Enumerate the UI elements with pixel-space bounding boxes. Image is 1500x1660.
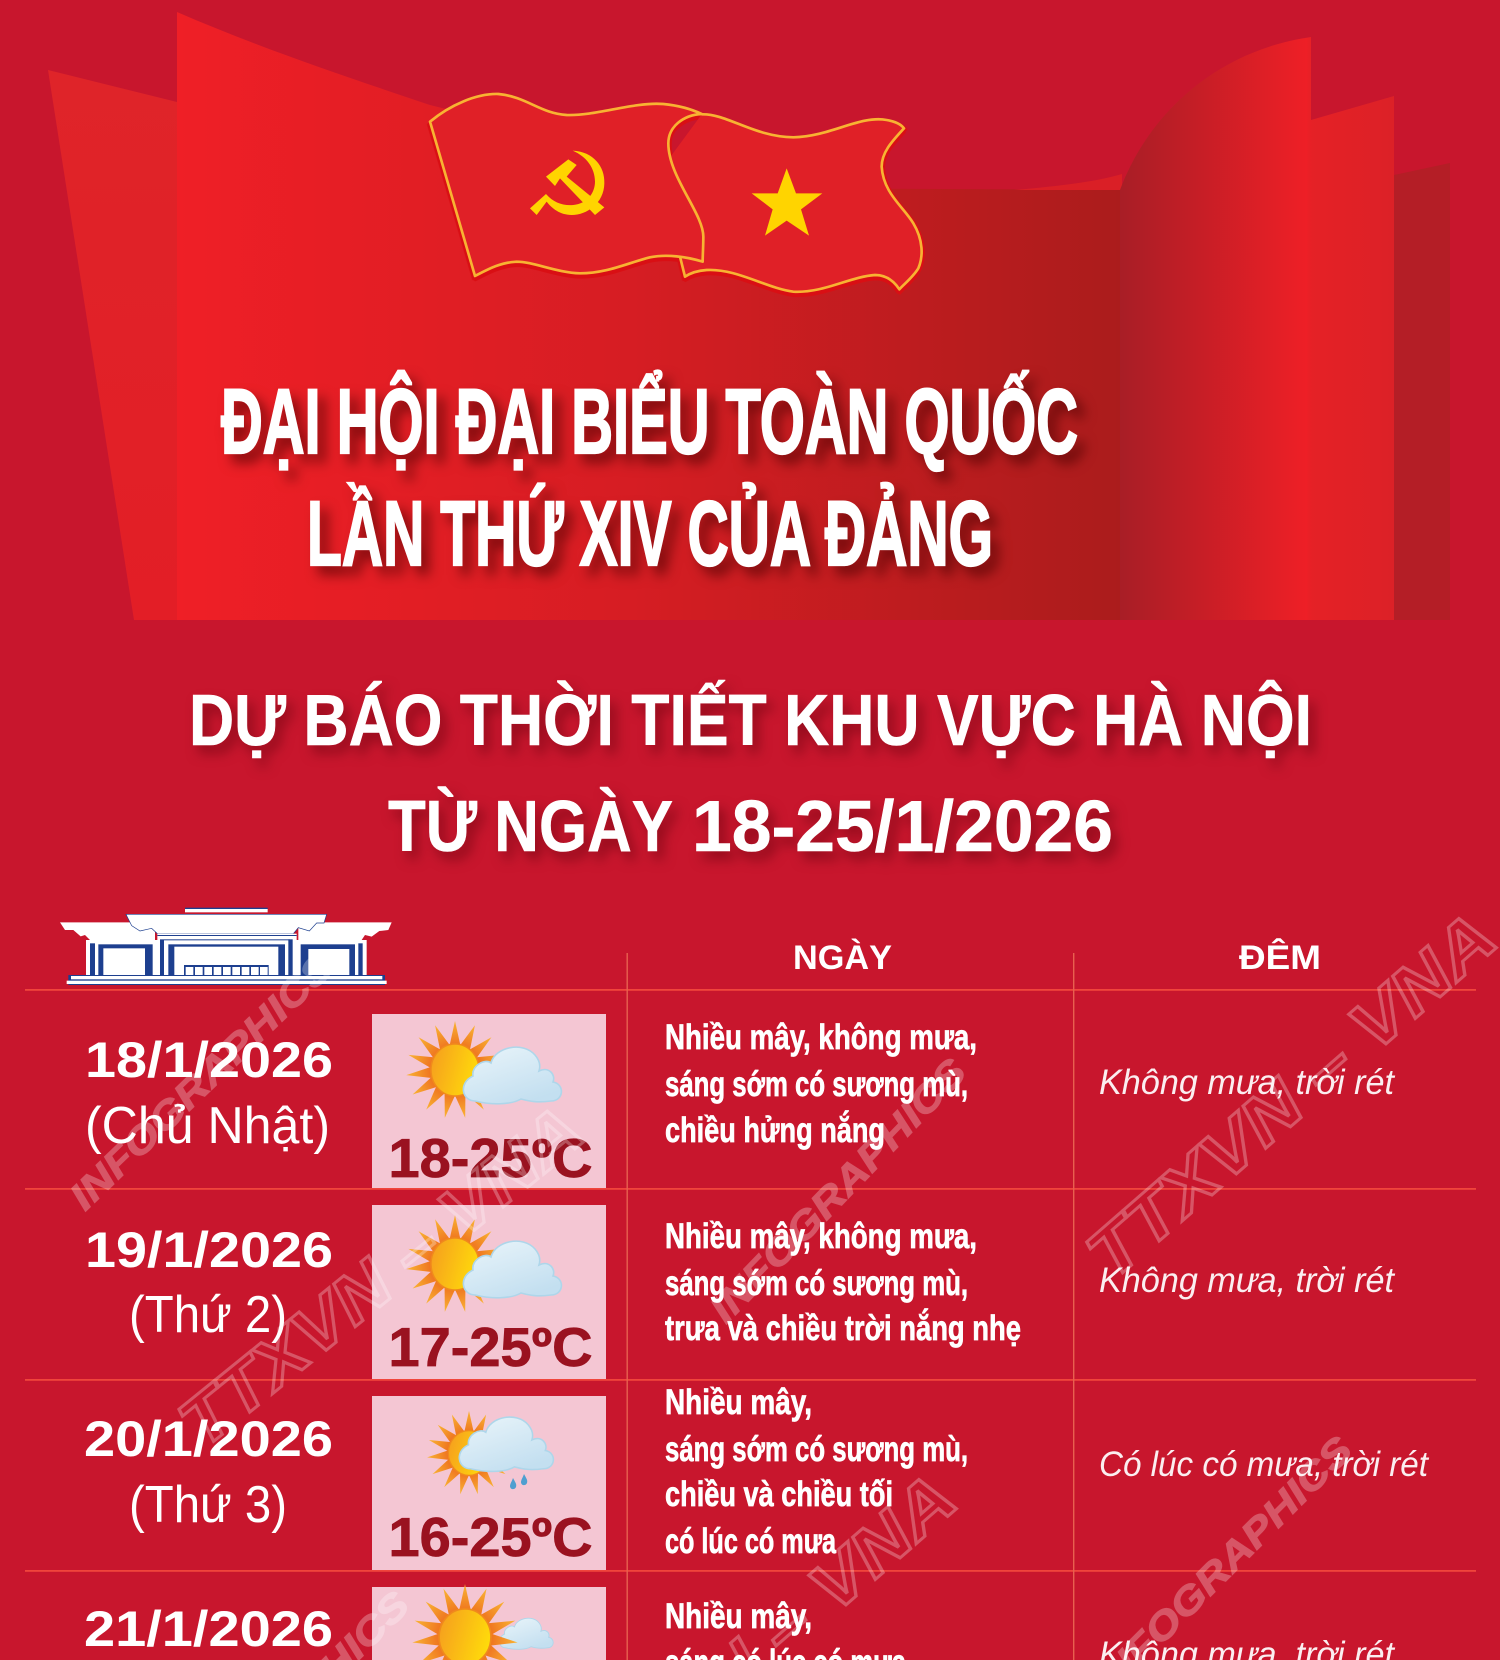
icon: party flag and national flag xyxy=(430,94,922,292)
date: 18/1/2026 xyxy=(85,1032,333,1088)
date: (Chủ Nhật) xyxy=(85,1097,330,1155)
date: 20/1/2026 xyxy=(84,1411,333,1467)
heading: Hanoi weather forecast: TỪ NGÀY xyxy=(388,786,673,867)
daytime forecast: chiều hửng nắng xyxy=(665,1110,885,1150)
watermarks: INFOGRAPHICS xyxy=(62,946,342,1218)
weather card: 16-25ºC xyxy=(388,1506,592,1568)
daytime forecast: Nhiều mây, xyxy=(665,1383,812,1422)
column header: day: NGÀY xyxy=(793,939,892,977)
heading: Hanoi weather forecast: DỰ BÁO THỜI TIẾT KHU VỰC HÀ NỘI xyxy=(189,680,1312,761)
row: 20/1/2026 xyxy=(84,1383,1429,1570)
daytime forecast xyxy=(665,1217,1021,1348)
row: 19/1/2026 xyxy=(85,1205,1395,1379)
night forecast: Không mưa, trời rét xyxy=(1099,1261,1395,1300)
daytime forecast xyxy=(665,1597,906,1660)
weather card: 17-25ºC xyxy=(388,1316,592,1378)
icon: rain drops xyxy=(510,1474,527,1489)
watermarks: TTXVN – VNA xyxy=(1072,898,1500,1293)
title: party congress xyxy=(221,369,1078,585)
daytime forecast: Nhiều mây, không mưa, xyxy=(665,1018,977,1057)
row: 18/1/2026 xyxy=(85,1014,1395,1189)
weather card: 18-25ºC xyxy=(388,1127,592,1189)
watermarks: INFOGRAPHICS xyxy=(702,1051,975,1331)
row: 21/1/2026 xyxy=(84,1584,1395,1660)
weather card xyxy=(372,1014,606,1189)
daytime forecast: Nhiều mây, không mưa, xyxy=(665,1217,977,1256)
date xyxy=(85,1032,333,1155)
daytime forecast xyxy=(665,1018,977,1150)
watermarks xyxy=(62,898,1500,1660)
heading: Hanoi weather forecast: 18-25/1/2026 xyxy=(692,787,1113,867)
daytime forecast: Nhiều mây, xyxy=(665,1597,812,1636)
date: 19/1/2026 xyxy=(85,1222,333,1278)
title: party congress: LẦN THỨ XIV CỦA ĐẢNG xyxy=(307,482,993,585)
icon: National Convention Center building xyxy=(60,908,392,985)
date: 21/1/2026 xyxy=(84,1601,333,1657)
date xyxy=(84,1411,333,1534)
icon: hammer and sickle xyxy=(530,151,604,215)
daytime forecast: có lúc có mưa xyxy=(665,1522,836,1561)
weather card xyxy=(372,1584,606,1660)
daytime forecast: sáng sớm có sương mù, xyxy=(665,1430,968,1469)
night forecast: Có lúc có mưa, trời rét xyxy=(1099,1445,1429,1484)
weather card xyxy=(372,1205,606,1379)
icon: gold star xyxy=(752,168,822,236)
date xyxy=(85,1222,333,1344)
daytime forecast: sáng sớm có sương mù, xyxy=(665,1065,968,1104)
watermarks: TTXVN – VNA xyxy=(165,1091,597,1462)
date: (Thứ 3) xyxy=(129,1476,287,1534)
daytime forecast xyxy=(665,1383,968,1561)
heading: Hanoi weather forecast xyxy=(189,680,1312,867)
column header: night: ĐÊM xyxy=(1239,939,1321,977)
date: (Thứ 2) xyxy=(129,1286,287,1344)
daytime forecast: sáng sớm có sương mù, xyxy=(665,1264,968,1303)
banner: waving party flag backdrop xyxy=(48,12,1450,620)
weather card xyxy=(372,1396,606,1570)
daytime forecast: chiều và chiều tối xyxy=(665,1475,893,1514)
daytime forecast: trưa và chiều trời nắng nhẹ xyxy=(665,1308,1021,1348)
night forecast: Không mưa, trời rét xyxy=(1099,1063,1395,1102)
